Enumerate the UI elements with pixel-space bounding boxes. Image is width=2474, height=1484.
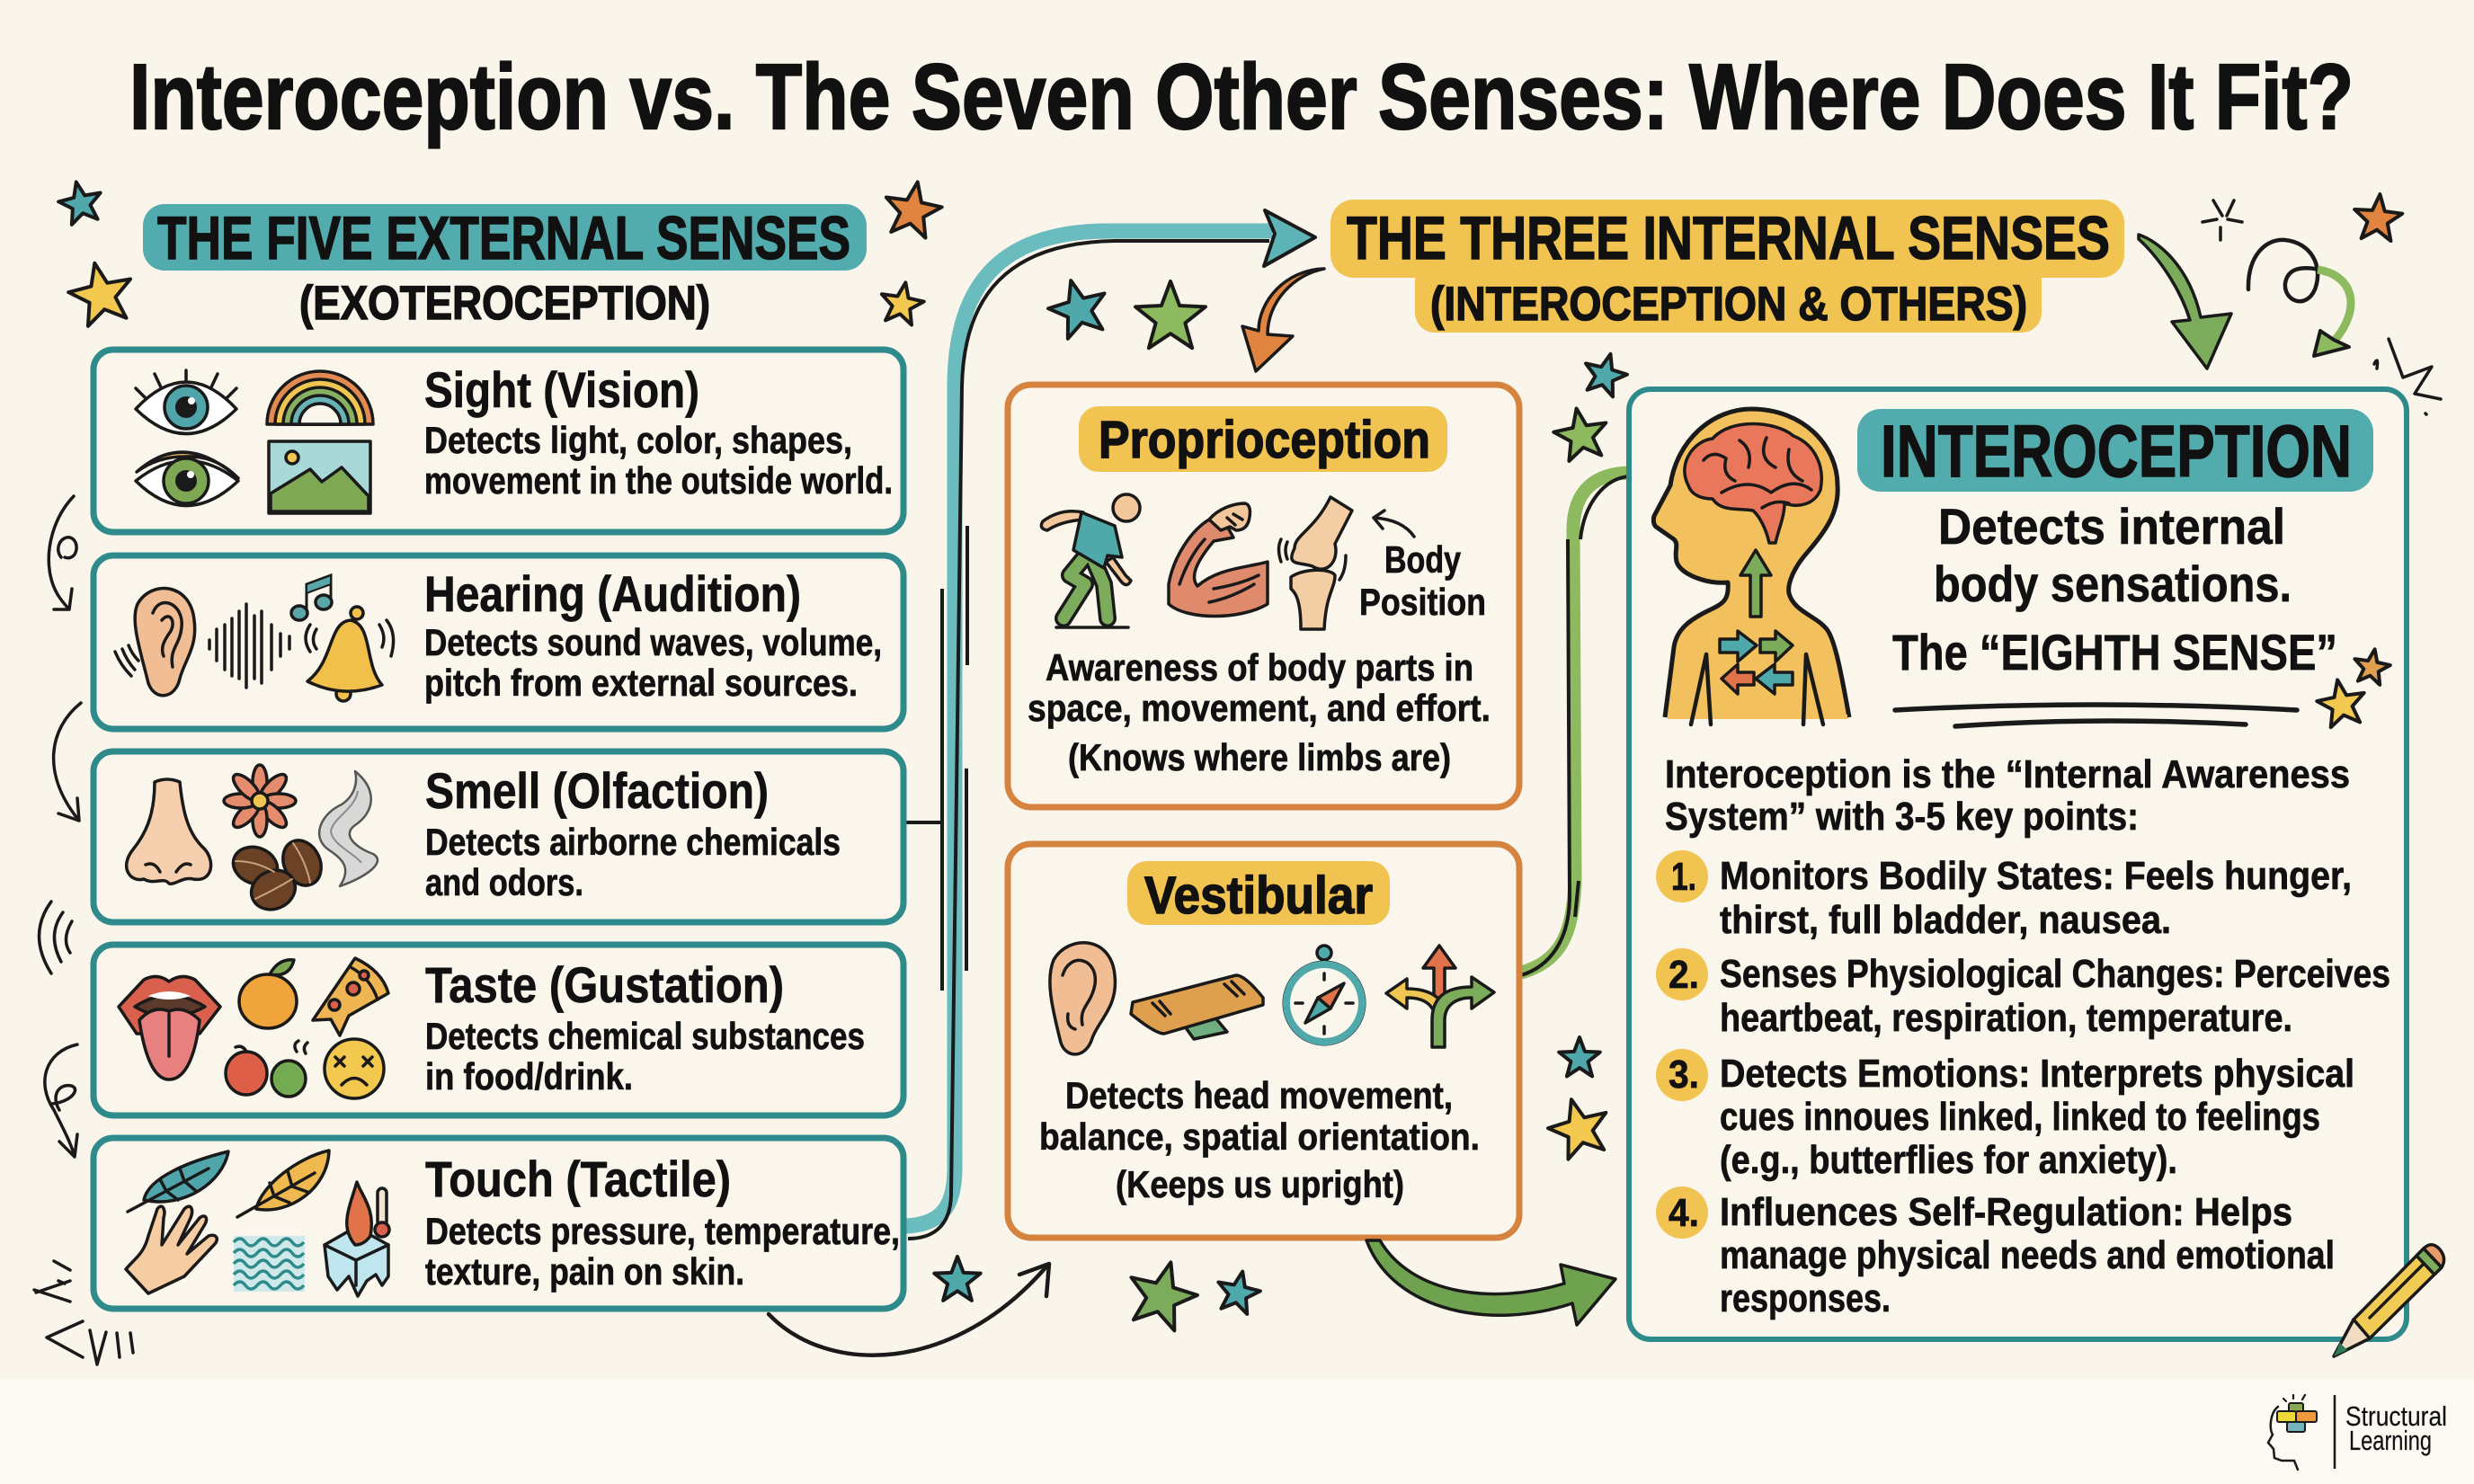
star: yellow mid-right bbox=[1543, 1092, 1615, 1162]
list item 1: Monitors Bodily States: Feels hunger, bbox=[1720, 854, 2352, 898]
star: green center bbox=[1135, 281, 1206, 348]
text: taste: in food/drink. bbox=[425, 1055, 633, 1097]
icon: sound wave bbox=[209, 604, 289, 688]
icon: green eye bbox=[136, 452, 238, 505]
heading: five external senses: (EXOTEROCEPTION) bbox=[299, 277, 710, 330]
text: proprioception description bbox=[1028, 646, 1491, 778]
icon: flexed arm muscle bbox=[1169, 503, 1268, 617]
star: teal bottom-left bbox=[934, 1257, 981, 1301]
star: yellow header bbox=[877, 279, 927, 326]
icon: balance board bbox=[1131, 975, 1263, 1039]
list item 3: (e.g., butterflies for anxiety). bbox=[1720, 1138, 2177, 1182]
list item 1: 1. bbox=[1671, 855, 1696, 899]
icon: bell bbox=[306, 607, 394, 701]
icon: water texture bbox=[234, 1236, 305, 1292]
list item 3: cues innoues linked, linked to feelings bbox=[1720, 1095, 2320, 1139]
star: teal top-left bbox=[56, 178, 105, 227]
star: green right bbox=[1551, 404, 1611, 463]
text: hearing: Hearing (Audition) bbox=[424, 565, 801, 622]
label: proprioception: Proprioception bbox=[1099, 411, 1430, 469]
heading: five external senses bbox=[143, 204, 867, 330]
panel: vestibular bbox=[1008, 844, 1519, 1238]
logo text: Learning bbox=[2349, 1425, 2432, 1456]
icon: landscape picture bbox=[269, 441, 370, 513]
text: touch: Detects pressure, temperature, bbox=[425, 1210, 900, 1252]
doodle: looped arrow one bbox=[49, 496, 76, 609]
doodle: looped arrow three bbox=[45, 1044, 77, 1157]
text: taste: Taste (Gustation) bbox=[425, 956, 784, 1013]
text: taste bbox=[425, 956, 865, 1097]
list item 3 bbox=[1656, 1049, 2354, 1182]
panel: taste bbox=[93, 945, 903, 1115]
logo: structural learning bbox=[2268, 1395, 2447, 1470]
arrow: green curved to interoception bbox=[1366, 1240, 1615, 1325]
list item 2: heartbeat, respiration, temperature. bbox=[1720, 996, 2292, 1040]
icon: compass bbox=[1284, 946, 1365, 1044]
small arrow and body position label: Position bbox=[1359, 581, 1486, 623]
star: teal center bbox=[1043, 273, 1113, 342]
text: hearing: pitch from external sources. bbox=[424, 662, 858, 704]
icon: head and body silhouette with brain bbox=[1653, 409, 1849, 724]
text: vestibular description bbox=[1039, 1074, 1480, 1205]
text: interoception summary: The “EIGHTH SENSE” bbox=[1892, 624, 2337, 680]
doodle: looped arrow two bbox=[54, 703, 81, 821]
heading: three internal senses: THE THREE INTERNAL SENSES bbox=[1347, 204, 2110, 272]
text: vestibular description: (Keeps us upright) bbox=[1116, 1163, 1404, 1205]
heading: five external senses: THE FIVE EXTERNAL SENSES bbox=[157, 204, 850, 272]
text: interoception summary: Detects internal bbox=[1938, 498, 2285, 555]
doodle: squiggle bbox=[2374, 339, 2441, 414]
text: touch bbox=[425, 1151, 900, 1293]
star: green bottom bbox=[1121, 1254, 1204, 1334]
text: sight: Detects light, color, shapes, bbox=[424, 419, 852, 461]
icon: three-way arrows bbox=[1386, 946, 1494, 1047]
panel: proprioception bbox=[1008, 385, 1519, 807]
text: interoception summary bbox=[1892, 498, 2337, 680]
star: teal mid-right bbox=[1559, 1037, 1600, 1076]
star: orange inside panel bbox=[2351, 646, 2392, 686]
text: sight: Sight (Vision) bbox=[424, 361, 699, 418]
list item 2 bbox=[1656, 948, 2390, 1040]
doodle: sparkle bbox=[2203, 200, 2242, 240]
icon: knee joint bbox=[1278, 497, 1352, 629]
text: intro: Interoception is the “Internal Awareness bbox=[1665, 752, 2350, 796]
text: vestibular description: balance, spatial orientation. bbox=[1039, 1115, 1480, 1158]
logo text: Structural bbox=[2345, 1400, 2447, 1432]
small arrow and body position label bbox=[1359, 511, 1486, 623]
text: smell: Smell (Olfaction) bbox=[425, 762, 769, 819]
doodle: burst marks bbox=[34, 1261, 133, 1364]
text: touch: Touch (Tactile) bbox=[425, 1151, 731, 1207]
icon: smoke bbox=[319, 771, 378, 886]
icon: balancing person bbox=[1041, 494, 1140, 627]
panel: sight bbox=[93, 350, 903, 532]
text: proprioception description: Awareness of body parts in bbox=[1046, 646, 1473, 689]
icon: pizza bbox=[313, 958, 388, 1035]
text: smell bbox=[425, 762, 841, 903]
icon: apple and lime bbox=[226, 1041, 307, 1097]
list item 4 bbox=[1656, 1186, 2335, 1320]
icon: teal feather bbox=[128, 1151, 228, 1212]
icon: body arrows bbox=[1720, 631, 1793, 694]
icon: nose bbox=[127, 779, 211, 884]
list item 3: Detects Emotions: Interprets physical bbox=[1720, 1052, 2354, 1096]
text: hearing: Detects sound waves, volume, bbox=[424, 621, 882, 663]
panel: smell bbox=[93, 751, 903, 922]
small arrow and body position label: Body bbox=[1384, 538, 1462, 581]
star: yellow inside panel bbox=[2314, 676, 2369, 729]
doodle: sound arcs bbox=[40, 902, 72, 973]
icon: rainbow bbox=[267, 371, 373, 424]
arrow: teal connector from touch to internal senses bbox=[906, 210, 1315, 1239]
label: interoception: INTEROCEPTION bbox=[1881, 411, 2352, 493]
star: orange header bbox=[880, 177, 946, 240]
arrow: black curved to vestibular bbox=[769, 1264, 1049, 1355]
panel: interoception bbox=[1629, 389, 2407, 1339]
heading: three internal senses: (INTEROCEPTION & OTHERS) bbox=[1430, 278, 2027, 331]
text: smell: and odors. bbox=[425, 861, 583, 903]
text: proprioception description: space, movement, and effort. bbox=[1028, 687, 1491, 729]
text: hearing bbox=[424, 565, 882, 704]
logo text bbox=[2345, 1400, 2447, 1456]
icon: sad face bbox=[325, 1039, 384, 1098]
list item 1: thirst, full bladder, nausea. bbox=[1720, 898, 2171, 942]
list item 4: manage physical needs and emotional bbox=[1720, 1233, 2335, 1277]
star: teal right bbox=[1580, 349, 1631, 399]
arrow: orange to proprioception bbox=[1242, 269, 1324, 371]
panel: hearing bbox=[93, 555, 903, 729]
text: proprioception description: (Knows where limbs are) bbox=[1068, 736, 1451, 778]
text: taste: Detects chemical substances bbox=[425, 1015, 865, 1057]
icon: hand bbox=[126, 1206, 217, 1293]
text: sight bbox=[424, 361, 893, 502]
text: vestibular description: Detects head movement, bbox=[1065, 1074, 1453, 1116]
icon: ice, flame and thermometer bbox=[325, 1182, 389, 1296]
text: sight: movement in the outside world. bbox=[424, 459, 893, 502]
star: yellow left bbox=[64, 256, 138, 329]
text: touch: texture, pain on skin. bbox=[425, 1250, 744, 1293]
heading: three internal senses bbox=[1330, 200, 2124, 333]
icon: mouth and tongue bbox=[119, 976, 220, 1080]
text: intro: System” with 3-5 key points: bbox=[1665, 795, 2139, 839]
icon: coffee beans bbox=[228, 834, 328, 917]
panel: touch bbox=[93, 1138, 903, 1309]
list item 3: 3. bbox=[1669, 1053, 1699, 1097]
text: intro bbox=[1665, 752, 2350, 839]
list item 4: 4. bbox=[1669, 1191, 1699, 1235]
icon: ear bbox=[1050, 943, 1115, 1054]
icon: yellow feather bbox=[237, 1151, 329, 1217]
icon: ear bbox=[115, 589, 195, 696]
arrow: green to interoception bbox=[2139, 235, 2231, 369]
icon: upward green arrow bbox=[1740, 550, 1771, 617]
text: smell: Detects airborne chemicals bbox=[425, 821, 841, 863]
text: interoception summary: body sensations. bbox=[1934, 555, 2292, 612]
doodle: curly green arrow bbox=[2248, 240, 2351, 356]
logo icon: head with blocks bbox=[2268, 1395, 2317, 1470]
icon: pencil bbox=[2334, 1245, 2444, 1356]
list item 4: responses. bbox=[1720, 1276, 1891, 1320]
icon: blue eye bbox=[136, 370, 236, 433]
label: vestibular: Vestibular bbox=[1144, 866, 1373, 925]
arrow: green connector from vestibular to interoception bbox=[1521, 473, 1629, 975]
list item 2: 2. bbox=[1669, 953, 1699, 997]
star: orange top-right bbox=[2352, 192, 2404, 242]
star: teal bottom bbox=[1214, 1267, 1263, 1316]
icon: music notes bbox=[291, 575, 332, 620]
list item 1 bbox=[1656, 850, 2352, 942]
icon: orange bbox=[239, 960, 297, 1028]
icon: flower bbox=[224, 765, 296, 837]
list item 4: Influences Self-Regulation: Helps bbox=[1720, 1190, 2292, 1234]
